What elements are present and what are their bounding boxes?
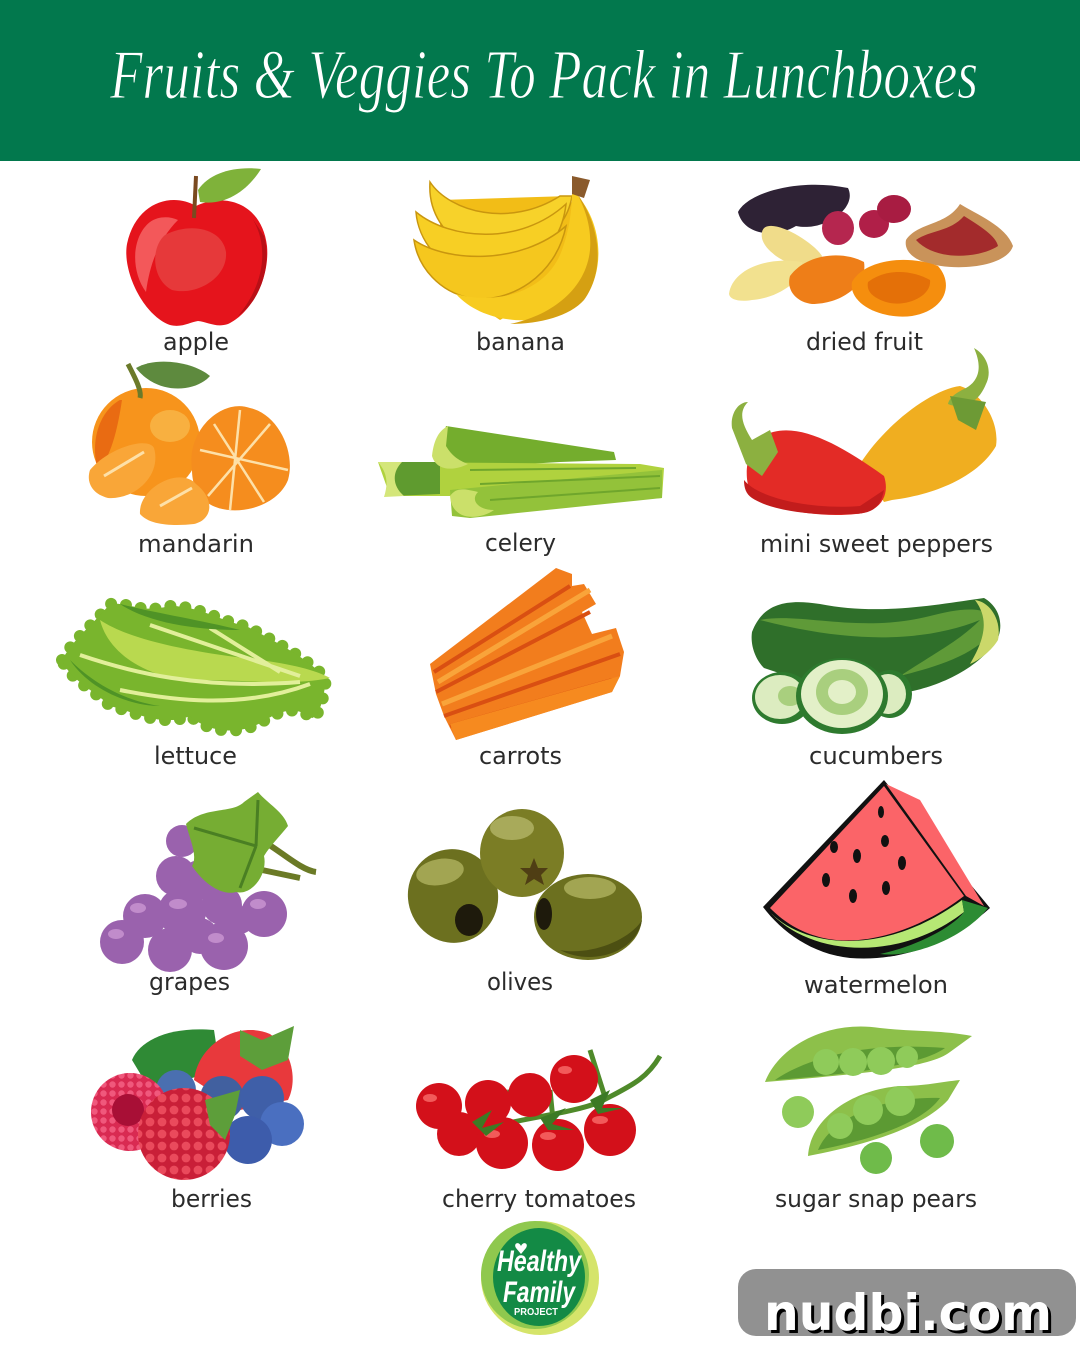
icon: cucumbers: [752, 598, 1000, 734]
icon: mini sweet peppers: [732, 348, 997, 515]
label: lettuce: lettuce: [154, 742, 237, 770]
icon: lettuce: [62, 604, 330, 731]
label: mini sweet peppers: mini sweet peppers: [760, 530, 993, 558]
watermark badge: nudbi.com: [767, 1287, 1055, 1345]
icon: dried fruit: [729, 185, 1013, 317]
icon: sugar snap peas: [765, 1026, 972, 1174]
watermark badge: [738, 1269, 1076, 1345]
label: dried fruit: dried fruit: [806, 328, 923, 356]
watermark badge: nudbi.com: [764, 1284, 1052, 1342]
logo: Healthy Family Project: Healthy: [497, 1245, 582, 1278]
icon: banana: [414, 176, 598, 324]
title banner: [0, 0, 1080, 161]
icon: olives: [397, 809, 642, 960]
label: apple: apple: [163, 328, 229, 356]
icon: celery: [378, 426, 664, 518]
icon: berries: [91, 1026, 304, 1180]
label: banana: banana: [476, 328, 565, 356]
label: watermelon: watermelon: [804, 971, 948, 999]
label: grapes: grapes: [149, 968, 230, 996]
logo: Healthy Family Project: [481, 1221, 599, 1335]
label: sugar snap pears: sugar snap pears: [775, 1185, 977, 1213]
label: berries: berries: [171, 1185, 252, 1213]
icon: apple: [126, 168, 267, 326]
label: cucumbers: cucumbers: [809, 742, 943, 770]
icon: cherry tomatoes: [416, 1050, 660, 1171]
logo: Healthy Family Project: Family: [503, 1276, 576, 1309]
label: celery: celery: [485, 529, 556, 557]
icon: grapes: [100, 792, 316, 972]
icon: mandarin: [89, 362, 290, 525]
icon: watermelon: [763, 780, 990, 959]
icon: carrots: [430, 568, 624, 740]
label: cherry tomatoes: cherry tomatoes: [442, 1185, 636, 1213]
label: olives: olives: [487, 968, 553, 996]
label: mandarin: mandarin: [138, 530, 254, 558]
label: carrots: carrots: [479, 742, 562, 770]
logo: Healthy Family Project: PROJECT: [514, 1307, 558, 1318]
